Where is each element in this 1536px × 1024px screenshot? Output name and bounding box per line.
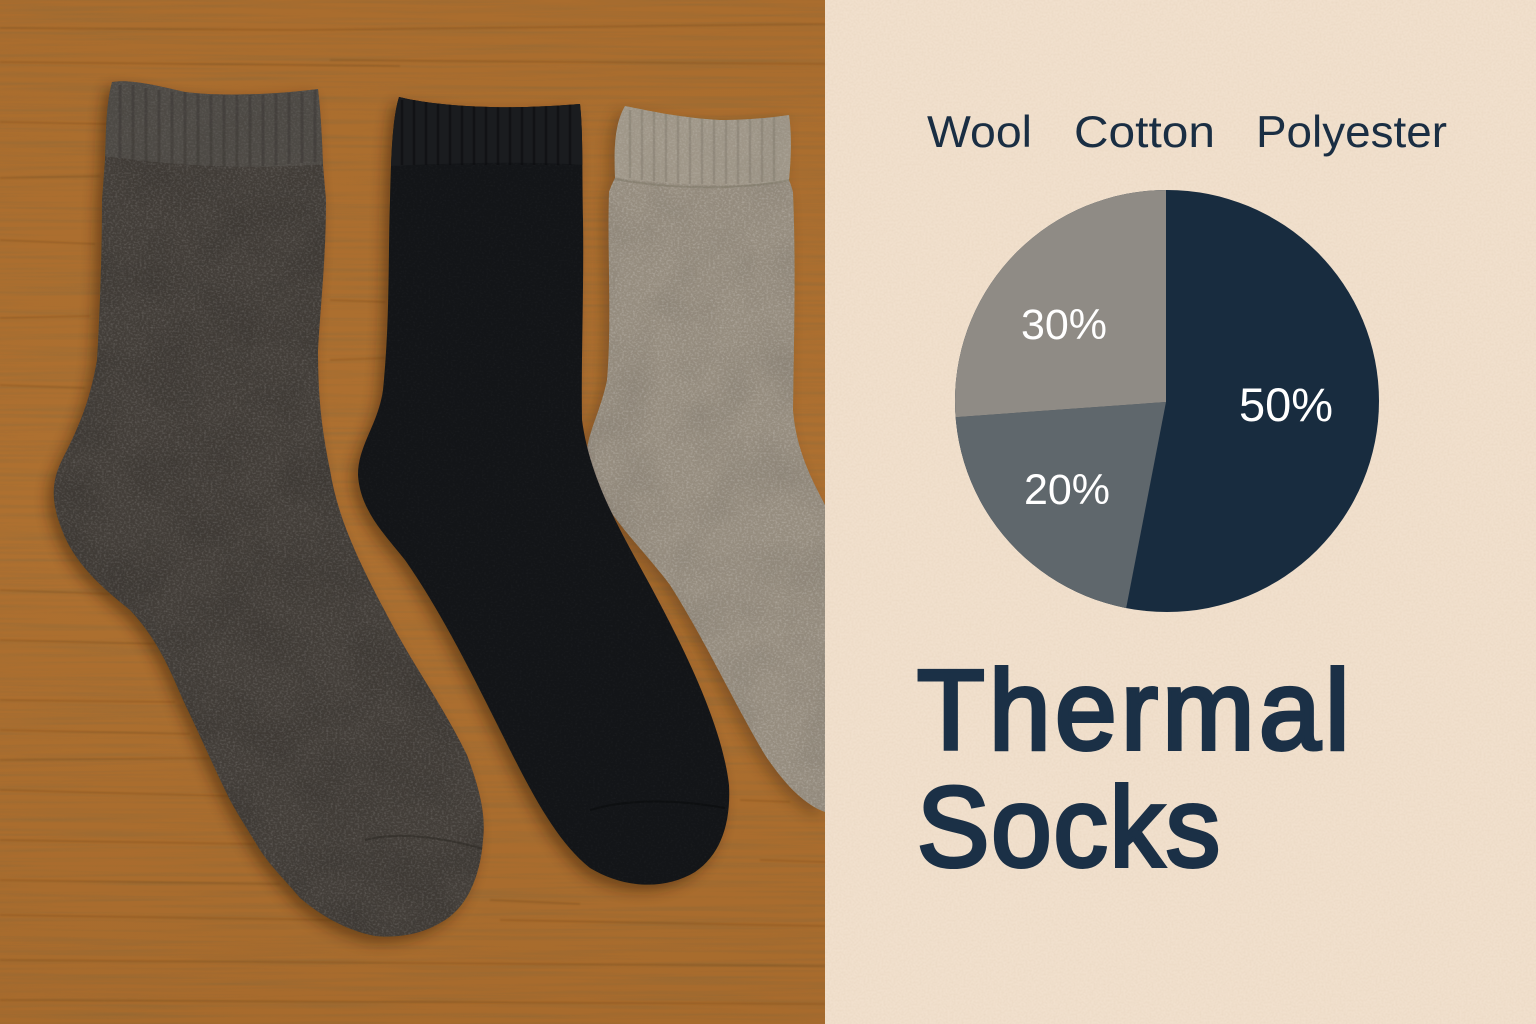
label: cotton: Cotton	[1074, 108, 1215, 157]
panel: cream information panel	[918, 114, 1446, 869]
title	[917, 647, 1354, 890]
slice: 50% navy	[955, 190, 1379, 612]
label: wool: Wool	[927, 108, 1032, 157]
label: polyester: Polyester	[1256, 108, 1447, 157]
panel: wooden background with socks	[0, 0, 830, 1024]
pie chart	[955, 190, 1379, 612]
icon: light beige sock	[580, 100, 830, 820]
value: 30%: 30%	[1021, 301, 1107, 349]
title: Thermal	[917, 647, 1354, 773]
slice: 30% warm grey	[955, 190, 1166, 418]
value: 50%: 50%	[1239, 378, 1333, 431]
slice: 20% slate	[956, 402, 1166, 608]
title: Socks	[917, 765, 1222, 890]
legend labels	[927, 108, 1447, 157]
icon: black sock	[350, 90, 740, 900]
value: 20%: 20%	[1024, 466, 1110, 514]
icon: dark grey sock	[45, 75, 495, 945]
